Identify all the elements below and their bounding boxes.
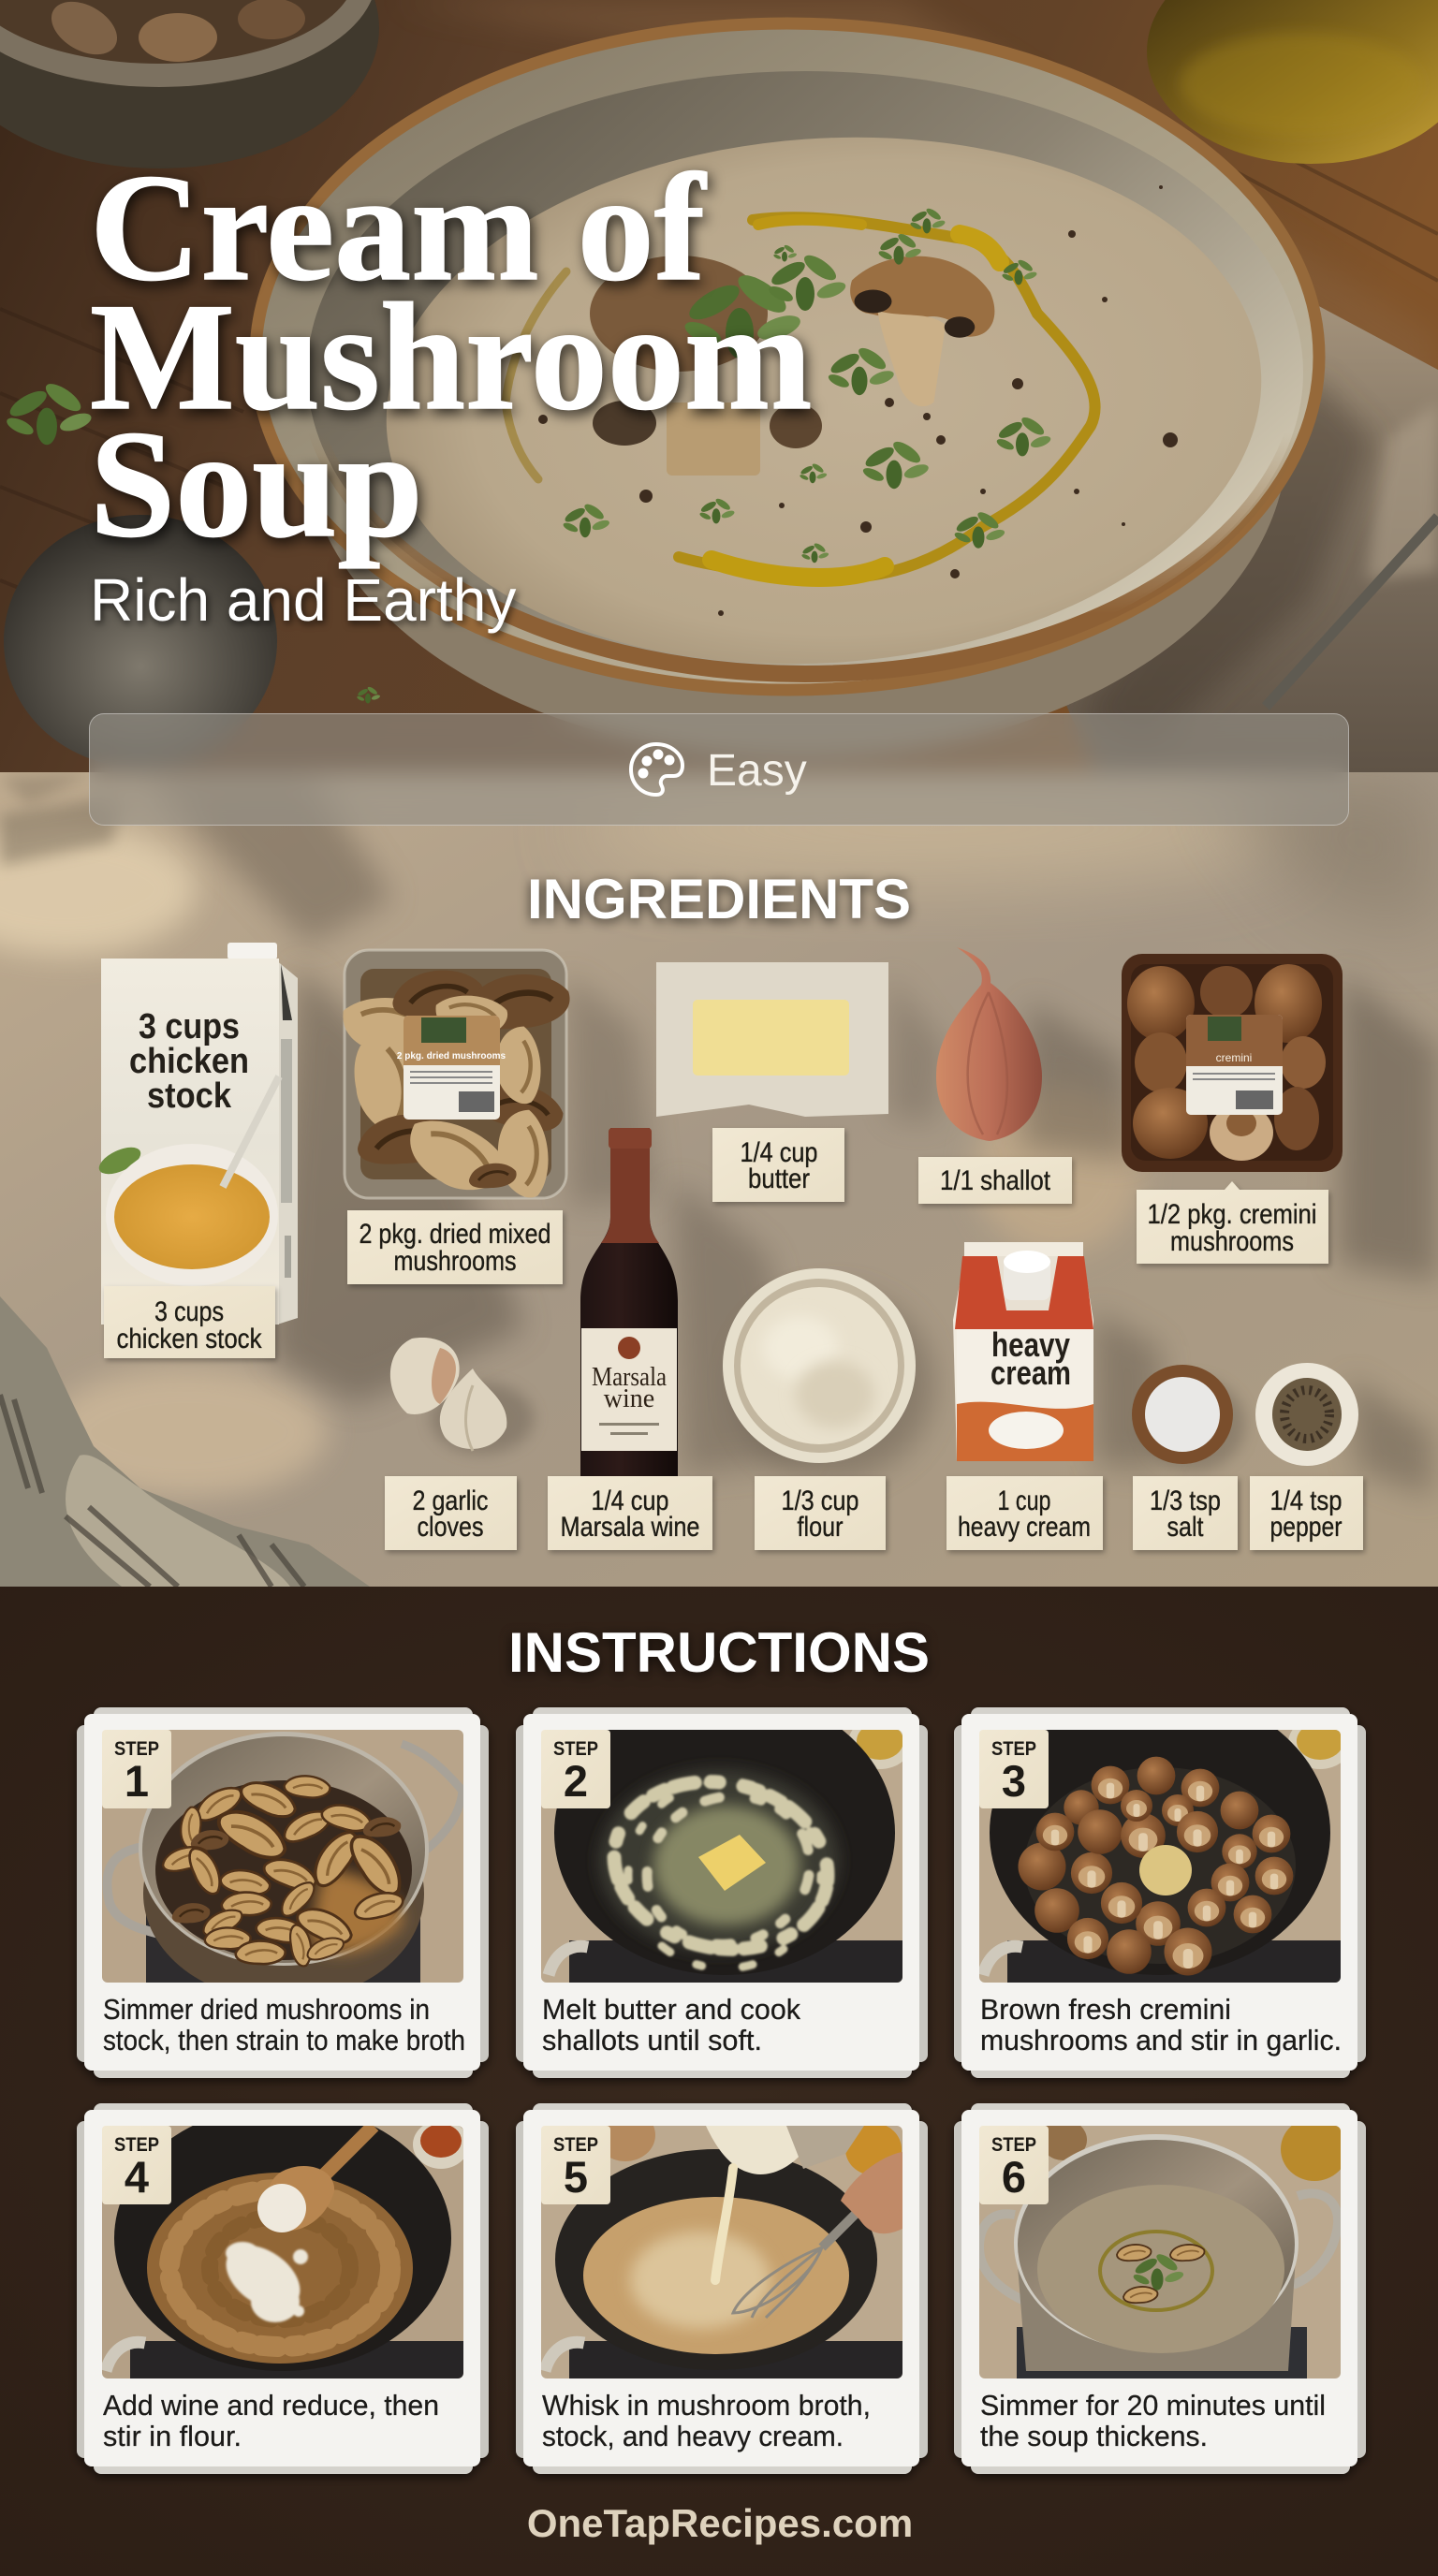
hand: [841, 2152, 902, 2233]
broth bowl on carton: [106, 1144, 278, 1286]
step 3 text: Brown fresh cremini: [980, 1993, 1231, 2026]
item: salt bowl: [1132, 1365, 1245, 1471]
tray label: 2 pkg. dried mushrooms: [397, 1051, 506, 1061]
step 5 text: [542, 2389, 871, 2452]
pepper specks: [538, 185, 1178, 616]
label: butter: butter: [748, 1164, 810, 1194]
step 1 photo: [102, 1730, 463, 2001]
label: shallot: [918, 1157, 1072, 1204]
step 3 badge: [979, 1730, 1049, 1808]
step 5 text: Whisk in mushroom broth,: [542, 2389, 871, 2422]
title: Soup: [90, 400, 423, 569]
text on cream carton: [990, 1325, 1071, 1392]
step 4 badge: [102, 2126, 171, 2204]
linen towel: [0, 1296, 370, 1587]
label: dried mushrooms: [347, 1210, 563, 1284]
step 5 badge: [541, 2126, 610, 2204]
label: flour: 1/3 cup: [781, 1486, 859, 1516]
tray label: [1186, 1015, 1283, 1115]
step 2 text: Melt butter and cook: [542, 1993, 800, 2026]
step 5 text: stock, and heavy cream.: [542, 2420, 844, 2452]
text on carton: [129, 1007, 249, 1116]
label: marsala: Marsala wine: [560, 1512, 700, 1543]
step 4 text: [103, 2389, 439, 2452]
title: [90, 143, 812, 569]
label: pepper: pepper: [1269, 1512, 1343, 1543]
label: flour: flour: [798, 1512, 844, 1543]
step 6 text: [980, 2389, 1326, 2452]
sauteed shallots: [598, 1763, 844, 1969]
label: salt: 1/3 tsp: [1150, 1486, 1221, 1516]
item: pepper bowl: [1255, 1363, 1358, 1466]
label: heavy cream: [946, 1476, 1103, 1550]
item: chicken stock carton: [95, 943, 298, 1325]
title: Cream of: [90, 143, 708, 313]
step 4 text: Add wine and reduce, then: [103, 2389, 439, 2422]
label: cremini: 1/2 pkg. cremini: [1148, 1199, 1316, 1230]
step 6 text: Simmer for 20 minutes until: [980, 2389, 1326, 2422]
label: heavy cream: heavy cream: [958, 1512, 1091, 1543]
label: dried mushrooms: 2 pkg. dried mixed: [360, 1219, 550, 1250]
label: salt: salt: [1167, 1512, 1204, 1543]
step 4 text: stir in flour.: [103, 2420, 242, 2452]
heading: ingredients: INGREDIENTS: [527, 868, 911, 930]
label: chicken stock: chicken stock: [116, 1324, 262, 1354]
label: chicken stock: 3 cups: [154, 1296, 224, 1327]
subtitle: Rich and Earthy: [90, 566, 516, 634]
step 5 photo: [541, 2109, 902, 2378]
heading: instructions: INSTRUCTIONS: [508, 1621, 930, 1684]
step 2 badge: 2: [564, 1756, 588, 1806]
step 5 badge: 5: [564, 2152, 588, 2202]
text on cream carton: cream: [990, 1354, 1071, 1392]
step 1 badge: 1: [125, 1756, 149, 1806]
step 2 badge: [541, 1730, 610, 1808]
difficulty text: Easy: [707, 746, 807, 796]
step 5 badge: STEP: [553, 2134, 598, 2156]
item: marsala wine bottle: [580, 1128, 678, 1479]
fork: [1266, 517, 1438, 707]
butter pat: [698, 1835, 766, 1891]
step 3 text: mushrooms and stir in garlic.: [980, 2024, 1342, 2056]
step 2 text: shallots until soft.: [542, 2024, 762, 2056]
difficulty bar: [89, 713, 1349, 826]
label: pepper: 1/4 tsp: [1269, 1486, 1343, 1516]
item: flour bowl: [723, 1268, 933, 1479]
spoon: [4, 515, 277, 768]
glass of oil: [1147, 0, 1438, 164]
label: chicken stock: [104, 1286, 275, 1358]
step 2 text: [542, 1993, 800, 2056]
whisk: [733, 2201, 869, 2318]
step 2 photo: [541, 1690, 912, 1983]
step 3 badge: 3: [1002, 1756, 1026, 1806]
label: dried mushrooms: mushrooms: [393, 1246, 517, 1277]
panel: instructions background: [0, 1587, 1438, 2576]
label: pepper: [1250, 1476, 1363, 1550]
mushrooms: [590, 256, 994, 476]
icon: palette: [631, 744, 682, 795]
garlic: [1139, 1845, 1192, 1895]
small bowl: [0, 0, 379, 168]
label: heavy cream: 1 cup: [998, 1486, 1050, 1516]
step 1 text: [103, 1993, 465, 2056]
label: butter: 1/4 cup: [740, 1137, 818, 1168]
olive oil drizzle: [679, 217, 1095, 578]
panel: ingredients: [0, 772, 1438, 1587]
label: garlic: cloves: [418, 1512, 483, 1543]
label: salt: [1133, 1476, 1238, 1550]
card: step 6: [954, 2103, 1366, 2474]
soup bowl: [256, 23, 1319, 758]
tray label: cremini: [1216, 1051, 1252, 1064]
step 6 photo: [979, 2117, 1348, 2378]
label: cremini: mushrooms: [1170, 1226, 1294, 1257]
label: garlic: 2 garlic: [412, 1486, 489, 1516]
step 4 photo: [102, 2105, 469, 2378]
card: step 5: [516, 2103, 928, 2474]
step 3 text: [980, 1993, 1342, 2056]
flour pile: [214, 2232, 312, 2322]
label: shallot: 1/1 shallot: [940, 1165, 1051, 1196]
text on carton: stock: [147, 1076, 232, 1116]
step 6 badge: [979, 2126, 1049, 2204]
label: flour: [755, 1476, 886, 1550]
step 1 badge: [102, 1730, 171, 1808]
napkin: [1066, 306, 1438, 772]
title: Mushroom: [90, 272, 812, 442]
poured cream: [706, 2126, 864, 2280]
text on cream carton: heavy: [991, 1325, 1070, 1364]
item: dried mushrooms tray: [339, 950, 570, 1203]
card: step 4: [77, 2103, 489, 2474]
wooden spoon: [294, 2126, 374, 2205]
parsley crumb: [357, 685, 381, 704]
text on carton: 3 cups: [139, 1007, 240, 1046]
step 1 text: stock, then strain to make broth: [103, 2024, 465, 2056]
step 3 badge: STEP: [991, 1738, 1036, 1760]
label: butter: [712, 1128, 844, 1202]
light and shadow on stone: [0, 772, 1438, 1573]
soup surface: [386, 137, 1262, 665]
item: garlic: [390, 1338, 534, 1454]
step 2 badge: STEP: [553, 1738, 598, 1760]
item: butter: [656, 962, 888, 1117]
parsley: [562, 207, 1052, 563]
panel: hero photo: [0, 0, 1438, 772]
card: step 3: [954, 1690, 1366, 2078]
footer brand: OneTapRecipes.com: [527, 2501, 913, 2545]
wine label: [581, 1328, 677, 1451]
wine label: wine: [604, 1384, 654, 1413]
card: step 2: [516, 1690, 928, 2078]
step 3 photo: [979, 1690, 1352, 1983]
text on carton: chicken: [129, 1042, 249, 1081]
item: heavy cream carton: [953, 1242, 1093, 1461]
item: cremini tray: [1122, 954, 1343, 1172]
step 6 text: the soup thickens.: [980, 2420, 1208, 2452]
step 6 badge: STEP: [991, 2134, 1036, 2156]
step 6 badge: 6: [1002, 2152, 1026, 2202]
step 1 text: Simmer dried mushrooms in: [103, 1993, 430, 2026]
step 4 badge: 4: [125, 2152, 149, 2202]
step 1 badge: STEP: [114, 1738, 159, 1760]
item shadows: [271, 964, 524, 1404]
label: marsala: 1/4 cup: [592, 1486, 668, 1516]
card: step 1: [77, 1707, 489, 2078]
wine label: Marsala: [592, 1363, 668, 1392]
parsley sprig on table: [7, 384, 92, 446]
item: shallot: [936, 947, 1042, 1141]
label: garlic: [385, 1476, 517, 1550]
step 4 badge: STEP: [114, 2134, 159, 2156]
label: marsala: [548, 1476, 712, 1550]
label: cremini: [1137, 1181, 1328, 1264]
tray label: [397, 1016, 506, 1120]
